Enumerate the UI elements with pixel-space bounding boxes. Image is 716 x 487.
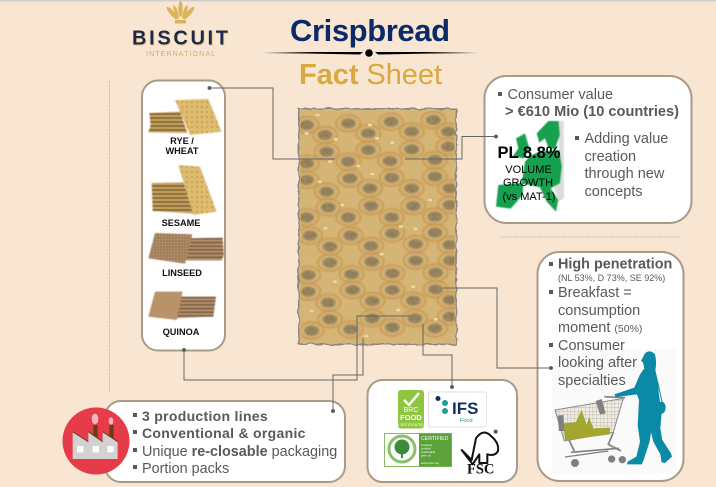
icon: shopping cart xyxy=(555,397,626,467)
logo: BRC Food xyxy=(398,390,424,428)
text: volume growth: PL 8.8% xyxy=(498,144,561,162)
logo: IFS Food xyxy=(428,392,486,427)
icon: factory xyxy=(62,408,130,474)
logo: RSPO certified: palm oil. xyxy=(421,454,432,458)
logo: Biscuit International: BISCUIT xyxy=(133,28,229,50)
subtitle: Fact Sheet: Fact Sheet xyxy=(299,59,442,91)
logo: RSPO certified: www.rspo.org xyxy=(421,461,440,465)
connector: varieties to crispbread xyxy=(208,86,335,159)
variety: sesame xyxy=(152,165,217,228)
title: Crispbread: Crispbread xyxy=(290,13,450,48)
text: production list: Unique re-closable packaging xyxy=(142,444,337,460)
logo: FSC xyxy=(462,430,498,478)
text: adding value: creation xyxy=(584,149,636,165)
text: adding value xyxy=(575,131,668,200)
title divider xyxy=(263,49,478,57)
connector: production to crispbread xyxy=(332,338,363,412)
connector: consumers to crispbread xyxy=(443,288,552,370)
connector: varieties bottom to crispbread xyxy=(182,316,410,380)
text: volume growth: GROWTH xyxy=(503,177,553,189)
text: volume growth: VOLUME xyxy=(505,164,552,176)
panel: certifications xyxy=(368,380,517,482)
variety: rye / wheat: RYE / xyxy=(170,136,194,146)
panel: consumers xyxy=(538,252,684,481)
logo: Biscuit International: BISCUIT xyxy=(132,28,228,50)
logo: RSPO certified: sustainable xyxy=(421,450,436,454)
variety: linseed: LINSEED xyxy=(162,268,202,278)
logo: RSPO certified: certified xyxy=(421,446,431,450)
icon: woman silhouette xyxy=(614,351,672,464)
connector: consumer value to crispbread xyxy=(405,135,498,159)
logo: RSPO certified xyxy=(384,434,452,466)
logo: BRC Food: CERTIFICATED xyxy=(398,423,424,427)
text: penetration: moment (50%) xyxy=(558,320,642,336)
logo: FSC: FSC xyxy=(467,462,494,478)
logo: RSPO certified: CERTIFIED xyxy=(421,436,449,442)
text: adding value: Adding value xyxy=(584,131,668,147)
text: adding value: through new xyxy=(584,166,665,182)
text: consumer value: Consumer value xyxy=(508,87,613,103)
text: penetration: Breakfast = xyxy=(558,285,632,301)
logo: RSPO certified: Contains xyxy=(421,443,433,447)
panel: production xyxy=(105,401,345,482)
text: production list xyxy=(133,408,337,477)
text: penetration: specialties xyxy=(558,373,626,389)
text: penetration: (NL 53%, D 73%, SE 92%) xyxy=(558,273,665,283)
text: penetration: looking after xyxy=(558,355,637,371)
logo: Biscuit International xyxy=(132,1,229,58)
logo: Biscuit International: INTERNATIONAL xyxy=(146,51,215,58)
text: production list: 3 production lines xyxy=(142,408,268,424)
panel: crispbread varieties xyxy=(142,80,225,350)
text: production list: Conventional & organic xyxy=(142,425,306,441)
illustration: shopper with cart xyxy=(552,349,677,473)
logo: IFS Food: Food xyxy=(460,418,473,424)
text: volume growth xyxy=(498,144,561,203)
panel: consumer value xyxy=(484,76,692,223)
logo: BRC Food: BRC xyxy=(404,407,418,414)
text: consumer value: > €610 Mio (10 countries) xyxy=(505,104,679,120)
text: volume growth: (vs MAT-1) xyxy=(503,191,555,203)
text: penetration: Consumer xyxy=(558,338,625,354)
variety: rye / wheat xyxy=(148,99,222,156)
variety: quinoa: QUINOA xyxy=(163,327,200,337)
text: penetration xyxy=(549,256,672,389)
variety: rye / wheat: WHEAT xyxy=(166,146,199,156)
variety: linseed xyxy=(148,233,224,278)
text: adding value: concepts xyxy=(584,184,643,200)
crispbread image xyxy=(295,108,463,345)
text: penetration: High penetration xyxy=(558,256,672,272)
variety: quinoa xyxy=(148,292,216,337)
map: Europe xyxy=(496,121,564,212)
text: production list: Portion packs xyxy=(142,461,229,477)
text: consumer value xyxy=(498,87,679,120)
icon: wheat crown xyxy=(165,1,196,24)
variety: sesame: SESAME xyxy=(162,218,200,228)
connector: certifications to crispbread xyxy=(423,324,454,388)
text: penetration: consumption xyxy=(558,303,640,319)
logo: BRC Food: FOOD xyxy=(400,413,422,422)
logo: IFS Food: IFS xyxy=(452,399,478,418)
